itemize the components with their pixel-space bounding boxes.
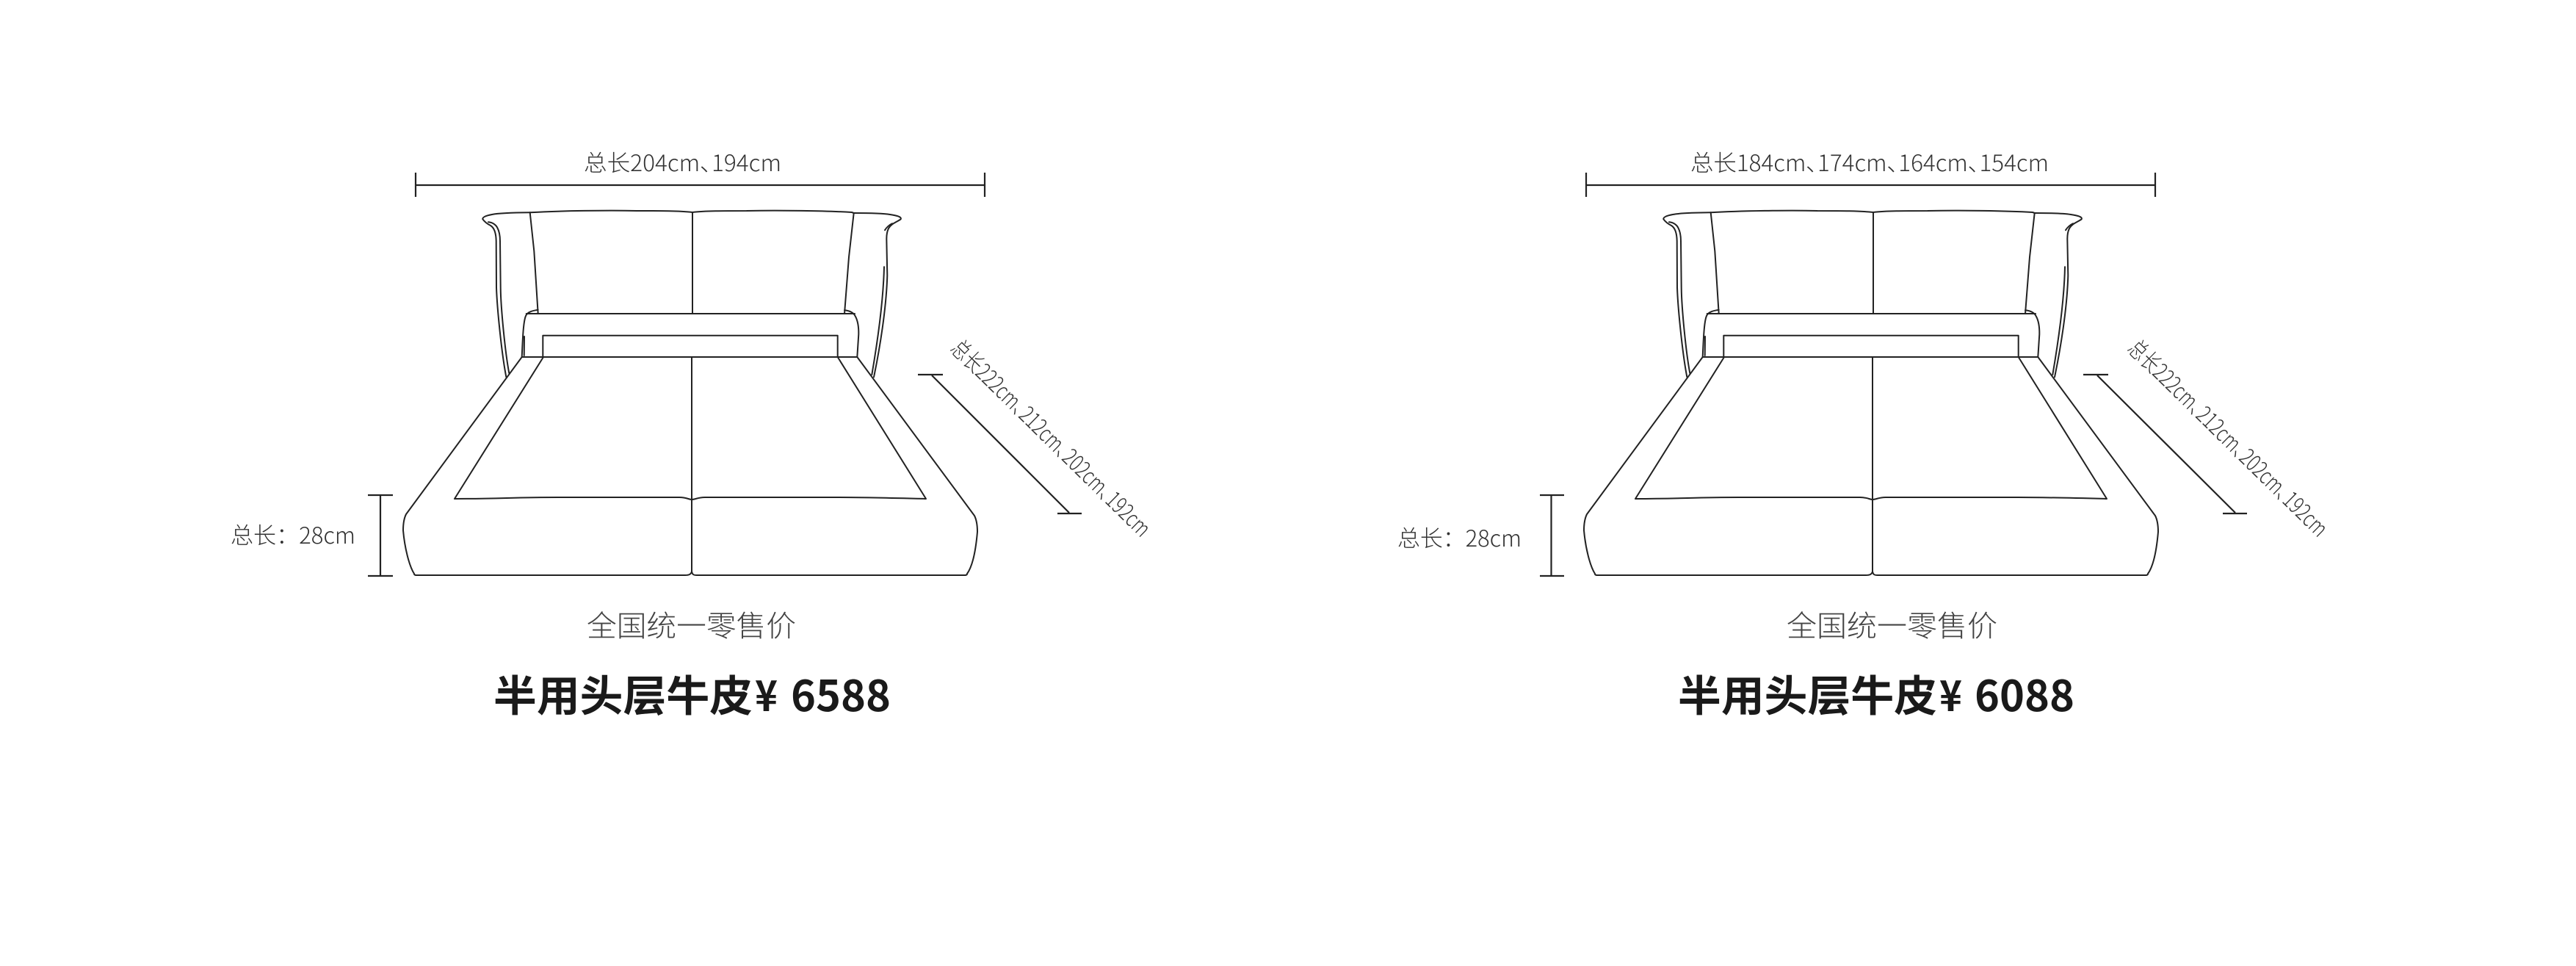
width label: 总长204cm、194cm xyxy=(584,145,781,178)
depth dimension bar xyxy=(2083,375,2247,513)
bed line drawing xyxy=(1584,211,2158,575)
price: 6588 xyxy=(791,662,891,724)
depth label: 总长222cm、212cm、202cm、192cm xyxy=(945,331,1159,543)
price: ¥ xyxy=(755,662,778,724)
price: 半用头层牛皮 xyxy=(1678,662,1937,724)
price: 半用头层牛皮 xyxy=(493,662,753,724)
price xyxy=(1678,662,2074,724)
bed line drawing xyxy=(403,211,977,575)
height label: 总长：28cm xyxy=(1397,520,1522,553)
price xyxy=(493,662,891,724)
height dimension bar xyxy=(368,495,393,576)
price: ¥ xyxy=(1939,662,1962,724)
panel: right bed 184cm xyxy=(1397,145,2337,724)
price: 6088 xyxy=(1975,662,2074,724)
depth label: 总长222cm、212cm、202cm、192cm xyxy=(2122,331,2337,543)
width dimension bar xyxy=(416,173,985,197)
depth dimension bar xyxy=(918,375,1082,513)
panel: left bed 204cm xyxy=(231,145,1159,724)
height label: 总长：28cm xyxy=(231,517,355,550)
height dimension bar xyxy=(1540,495,1564,576)
width label: 总长184cm、174cm、164cm、154cm xyxy=(1690,145,2049,178)
price caption: 全国统一零售价 xyxy=(1787,602,1997,645)
width dimension bar xyxy=(1586,173,2155,197)
price caption: 全国统一零售价 xyxy=(587,602,796,645)
